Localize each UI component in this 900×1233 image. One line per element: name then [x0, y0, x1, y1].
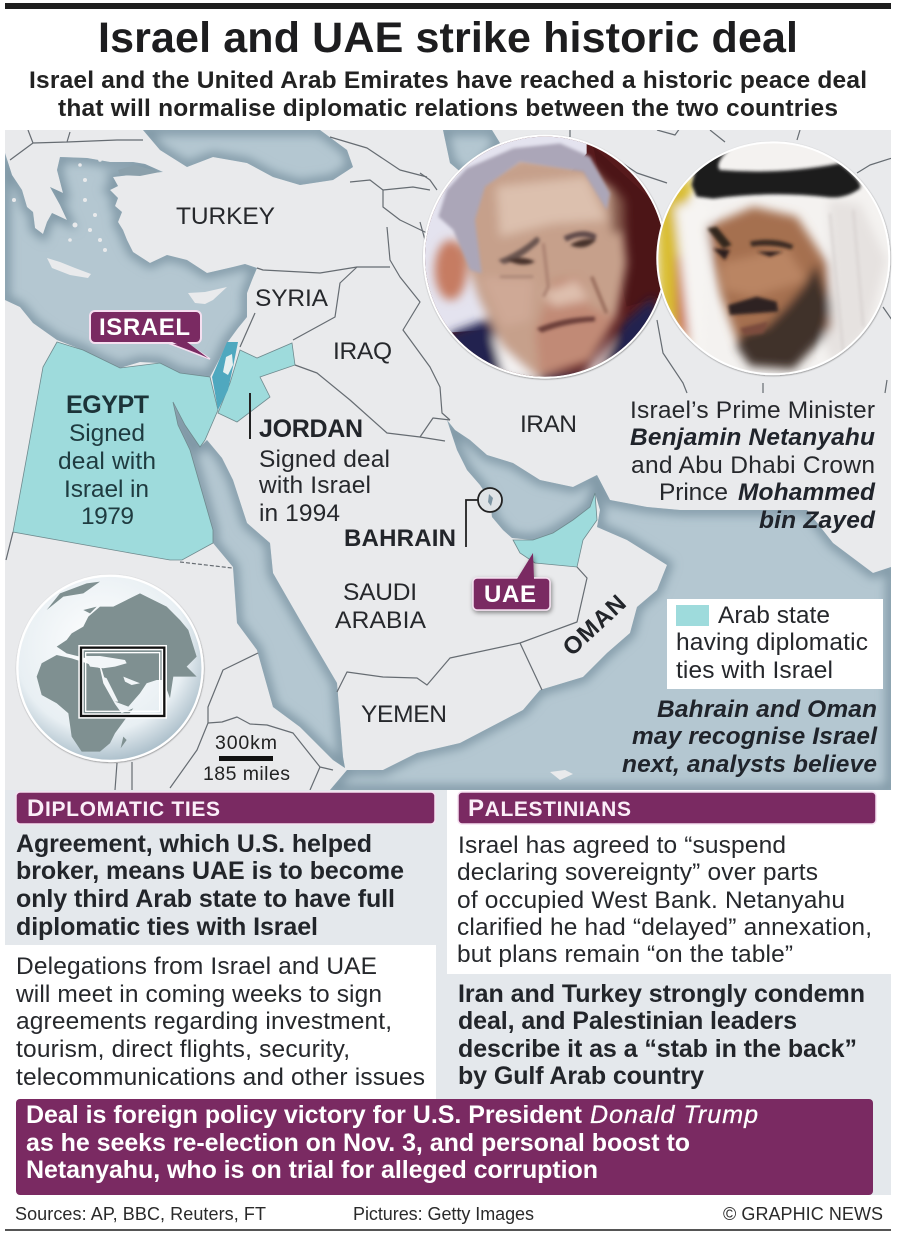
- palestinians lead text: [458, 980, 865, 1090]
- country label: Saudi Arabia: [335, 579, 427, 634]
- panel backgrounds: [5, 790, 891, 1195]
- palestinians body text: but plans remain “on the table”: [457, 941, 793, 968]
- callout: Israel: [90, 311, 210, 359]
- leaders caption: Mohammed: [738, 479, 876, 506]
- palestinians lead text: Iran and Turkey strongly condemn: [458, 980, 865, 1008]
- Jordan label: in 1994: [259, 500, 340, 527]
- analysts note: may recognise Israel: [632, 723, 878, 750]
- Netanyahu portrait: [422, 134, 662, 380]
- Bahrain label: [344, 500, 478, 552]
- palestinians body text: Israel has agreed to “suspend: [458, 832, 786, 859]
- leaders caption: bin Zayed: [759, 507, 876, 534]
- diplomatic ties lead text: only third Arab state to have full: [16, 885, 395, 913]
- footer credits: © GRAPHIC NEWS: [723, 1204, 883, 1224]
- banner: Trump victory: Deal is foreign policy victory for U.S. President: [26, 1101, 583, 1129]
- Egypt label: Israel in: [64, 476, 149, 503]
- heading: diplomatic ties: [16, 792, 435, 824]
- palestinians body text: declaring sovereignty” over parts: [457, 859, 818, 886]
- Egypt: [13, 342, 218, 560]
- callout: UAE: [473, 553, 550, 610]
- palestinians lead text: deal, and Palestinian leaders: [458, 1007, 797, 1035]
- diplomatic ties lead text: broker, means UAE is to become: [16, 857, 404, 885]
- legend: having diplomatic: [676, 629, 868, 656]
- diplomatic ties lead text: Agreement, which U.S. helped: [16, 830, 372, 858]
- Jordan label: [249, 393, 390, 527]
- Israel: [212, 342, 238, 410]
- diplomatic ties body text: will meet in coming weeks to sign: [15, 981, 382, 1008]
- scale bar: [203, 732, 290, 785]
- callout: UAE: UAE: [484, 581, 536, 608]
- islands: [12, 158, 573, 780]
- legend: Arab state: [718, 602, 830, 629]
- palestinians body text: clarified he had “delayed” annexation,: [457, 914, 872, 941]
- heading: diplomatic ties: DIPLOMATIC TIES: [27, 795, 220, 822]
- top rule: [5, 3, 891, 9]
- borders: [6, 128, 892, 790]
- leaders caption: Prince: [659, 479, 728, 506]
- sea: [5, 130, 891, 790]
- country label: Saudi Arabia: SAUDI: [343, 579, 417, 606]
- panel: palestinians: [457, 792, 876, 1090]
- palestinians lead text: describe it as a “stab in the back”: [458, 1035, 857, 1063]
- country label: Iran: IRAN: [520, 411, 577, 438]
- UAE: [513, 493, 597, 567]
- Jordan label: Signed deal: [259, 446, 390, 473]
- subtitle: [29, 67, 867, 122]
- Jordan: [218, 343, 295, 422]
- Marmara dark: [118, 168, 160, 176]
- diplomatic ties lead text: [16, 830, 404, 941]
- leaders caption: Benjamin Netanyahu: [630, 424, 875, 451]
- diplomatic ties body text: telecommunications and other issues: [16, 1064, 425, 1091]
- scale bar: 185 miles: [203, 763, 290, 785]
- subtitle: Israel and the United Arab Emirates have reached a historic peace deal: [29, 67, 867, 94]
- Bahrain marker: [478, 488, 502, 512]
- diplomatic ties lead text: diplomatic ties with Israel: [16, 913, 318, 941]
- country label: Iraq: IRAQ: [333, 338, 392, 365]
- heading: palestinians: [458, 792, 876, 824]
- leaders caption: and Abu Dhabi Crown: [631, 452, 875, 479]
- banner: Trump victory: [16, 1099, 873, 1195]
- Egypt label: 1979: [81, 503, 134, 530]
- subtitle: that will normalise diplomatic relations between the two countries: [58, 95, 838, 122]
- panel: diplomatic ties: [15, 792, 435, 1091]
- footer credits: Pictures: Getty Images: [353, 1204, 534, 1224]
- Jordan label: with Israel: [258, 472, 371, 499]
- diplomatic ties body text: agreements regarding investment,: [16, 1008, 392, 1035]
- legend: [667, 599, 883, 689]
- Egypt label: EGYPT: [66, 391, 149, 419]
- Bahrain label: BAHRAIN: [344, 525, 456, 552]
- diplomatic ties body text: tourism, direct flights, security,: [16, 1036, 350, 1063]
- Egypt label: deal with: [58, 448, 156, 475]
- Egypt label: [58, 391, 156, 530]
- palestinians body text: [457, 832, 872, 968]
- banner: Trump victory: Donald Trump: [590, 1101, 758, 1129]
- leaders caption: Israel’s Prime Minister: [630, 397, 875, 424]
- diplomatic ties body text: [15, 953, 425, 1091]
- legend: ties with Israel: [676, 657, 833, 684]
- heading: palestinians: PALESTINIANS: [468, 795, 631, 822]
- analysts note: Bahrain and Oman: [657, 696, 877, 723]
- country label: Oman: OMAN: [558, 590, 632, 661]
- banner: Trump victory: as he seeks re-election on Nov. 3, and personal boost to: [26, 1129, 690, 1157]
- footer credits: Sources: AP, BBC, Reuters, FT: [15, 1204, 266, 1224]
- Egypt label: Signed: [69, 420, 145, 447]
- footer credits: [15, 1204, 883, 1224]
- analysts note: [622, 696, 878, 778]
- map: [5, 128, 892, 792]
- country label: Saudi Arabia: ARABIA: [335, 607, 427, 634]
- diplomatic ties body text: Delegations from Israel and UAE: [16, 953, 377, 980]
- bin Zayed portrait: [653, 140, 893, 380]
- globe locator: [17, 576, 203, 761]
- palestinians lead text: by Gulf Arab country: [458, 1062, 704, 1090]
- country label: Yemen: YEMEN: [361, 701, 447, 728]
- scale bar: 300km: [215, 732, 277, 754]
- leaders caption: [630, 397, 876, 534]
- Jordan label: JORDAN: [259, 415, 363, 443]
- country label: Turkey: TURKEY: [176, 203, 275, 230]
- country label: Syria: SYRIA: [255, 285, 329, 312]
- analysts note: next, analysts believe: [622, 751, 877, 778]
- callout: Israel: ISRAEL: [99, 314, 190, 341]
- palestinians body text: of occupied West Bank. Netanyahu: [457, 887, 845, 914]
- bottom rule: [5, 1229, 891, 1231]
- banner: Trump victory: Netanyahu, who is on trial for alleged corruption: [26, 1156, 598, 1184]
- title: Israel and UAE strike historic deal: [98, 14, 798, 62]
